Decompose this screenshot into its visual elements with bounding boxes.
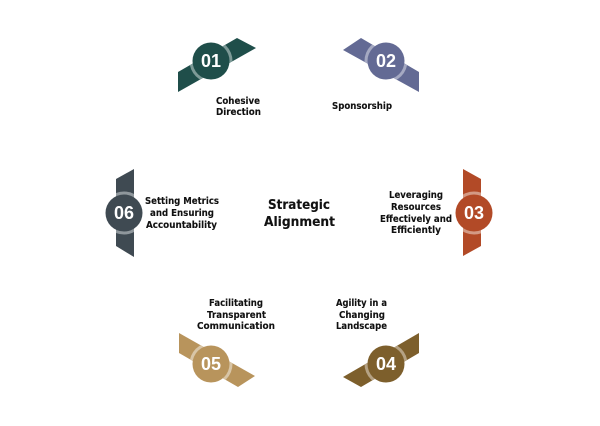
step 03: leveraging resources: Leveraging (389, 190, 443, 201)
step 03: leveraging resources: 03 (464, 203, 484, 223)
step 02: sponsorship: Sponsorship (332, 101, 392, 112)
step 02: sponsorship: 02 (376, 51, 396, 71)
step 04: agility: Changing (339, 310, 385, 321)
step 06: metrics and accountability: and Ensuring (150, 208, 214, 219)
step 01: cohesive direction: 01 (201, 51, 221, 71)
step 05: transparent communication (179, 298, 275, 387)
step 06: metrics and accountability: 06 (114, 203, 134, 223)
step 01: cohesive direction: Cohesive (216, 96, 260, 107)
step 04: agility: 04 (376, 354, 396, 374)
step 06: metrics and accountability: Accountability (146, 220, 218, 231)
step 04: agility (336, 298, 419, 387)
center title: Strategic (268, 197, 330, 213)
step 03: leveraging resources (380, 169, 496, 256)
step 05: transparent communication: Transparent (207, 310, 266, 321)
step 05: transparent communication: Communication (197, 321, 275, 332)
step 01: cohesive direction (178, 38, 261, 118)
step 05: transparent communication: Facilitating (209, 298, 263, 309)
infographic: strategic alignment cycle (106, 38, 492, 387)
center title (264, 197, 335, 230)
step 04: agility: Agility in a (336, 298, 387, 309)
step 02: sponsorship (332, 38, 419, 112)
step 03: leveraging resources: Effectively and (380, 214, 452, 225)
step 06: metrics and accountability (102, 169, 219, 257)
step 05: transparent communication: 05 (201, 354, 221, 374)
step 06: metrics and accountability: Setting Metrics (145, 196, 219, 207)
step 03: leveraging resources: Efficiently (391, 225, 442, 236)
step 03: leveraging resources: Resources (391, 202, 441, 213)
center title: Alignment (264, 214, 335, 230)
step 01: cohesive direction: Direction (216, 107, 261, 118)
step 04: agility: Landscape (336, 321, 387, 332)
